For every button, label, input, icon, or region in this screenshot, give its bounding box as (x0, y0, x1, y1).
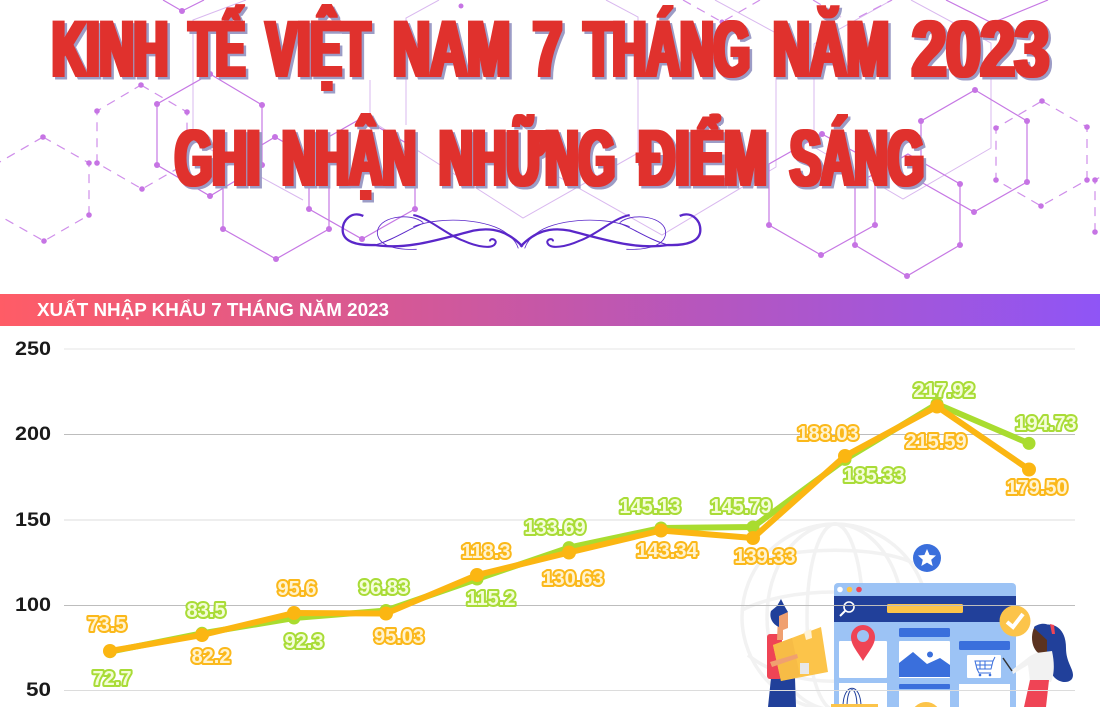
green data labels: 115.2 (467, 588, 515, 610)
orange data labels: 130.63 (542, 568, 604, 590)
orange data labels: 188.03 (797, 423, 859, 445)
title line 2: NHẬN (282, 113, 416, 202)
green data labels: 92.3 (285, 631, 323, 653)
orange data labels (88, 423, 1068, 668)
y axis labels: 250 (15, 339, 51, 360)
green data labels: 185.33 (843, 465, 905, 487)
green data labels: 145.13 (619, 496, 681, 518)
title line 1: THÁNG (584, 4, 750, 93)
lower cards (831, 683, 1010, 707)
orange data labels: 95.6 (278, 578, 316, 600)
y axis labels: 50 (26, 680, 51, 701)
icon: star badge (913, 544, 941, 572)
orange data labels: 143.34 (636, 540, 698, 562)
figure: man with parcel (767, 599, 828, 707)
title line 2: NHỮNG (439, 113, 615, 202)
orange data labels: 95.03 (374, 626, 424, 648)
illustration: online shopping globe (742, 524, 1073, 707)
green series line (104, 398, 1036, 658)
y axis labels: 150 (15, 510, 51, 531)
title line 2: SÁNG (790, 113, 924, 202)
decorative flourish (343, 214, 700, 249)
image card (899, 628, 950, 678)
title (52, 4, 1049, 202)
green data labels: 133.69 (524, 517, 586, 539)
title line 1: KINH (52, 4, 168, 93)
orange data labels: 73.5 (88, 614, 126, 636)
orange data labels: 82.2 (192, 646, 230, 668)
y axis labels: 100 (15, 595, 51, 616)
orange data labels: 215.59 (905, 431, 967, 453)
green data labels: 217.92 (913, 380, 975, 402)
orange data labels: 118.3 (462, 541, 510, 563)
title line 1: VIỆT (266, 4, 370, 93)
title line 1: NAM (393, 4, 510, 93)
orange data labels: 139.33 (734, 546, 796, 568)
cart card (959, 641, 1010, 678)
orange series line (103, 400, 1036, 658)
title line 1: TẾ (189, 4, 245, 93)
y axis labels (15, 339, 51, 701)
title line 2 (175, 113, 924, 202)
green data labels: 96.83 (359, 577, 409, 599)
green data labels: 72.7 (93, 668, 131, 690)
browser window (831, 583, 1016, 707)
y axis labels: 200 (15, 424, 51, 445)
title line 1: NĂM (773, 4, 889, 93)
title line 1: 7 (533, 4, 562, 93)
green data labels: 145.79 (710, 496, 772, 518)
green data labels: 194.73 (1015, 413, 1077, 435)
green data labels (93, 380, 1077, 690)
line chart: import-export (15, 339, 1077, 701)
title line 2: ĐIỂM (638, 113, 767, 202)
title line 1: 2023 (912, 4, 1049, 93)
icon: check badge (1000, 606, 1030, 636)
icon: globe (742, 524, 928, 707)
icon: search (840, 602, 854, 616)
section banner (0, 294, 1100, 326)
map card with pin (839, 625, 887, 678)
orange data labels: 179.50 (1006, 477, 1068, 499)
title line 2: GHI (175, 113, 260, 202)
green data labels: 83.5 (187, 600, 225, 622)
figure: woman with tablet (1003, 624, 1073, 707)
banner heading: XUẤT NHẬP KHẨU 7 THÁNG NĂM 2023 (37, 299, 389, 320)
grid lines (64, 349, 1075, 690)
title line 1 (52, 4, 1049, 93)
background hexagon pattern (0, 0, 1100, 279)
